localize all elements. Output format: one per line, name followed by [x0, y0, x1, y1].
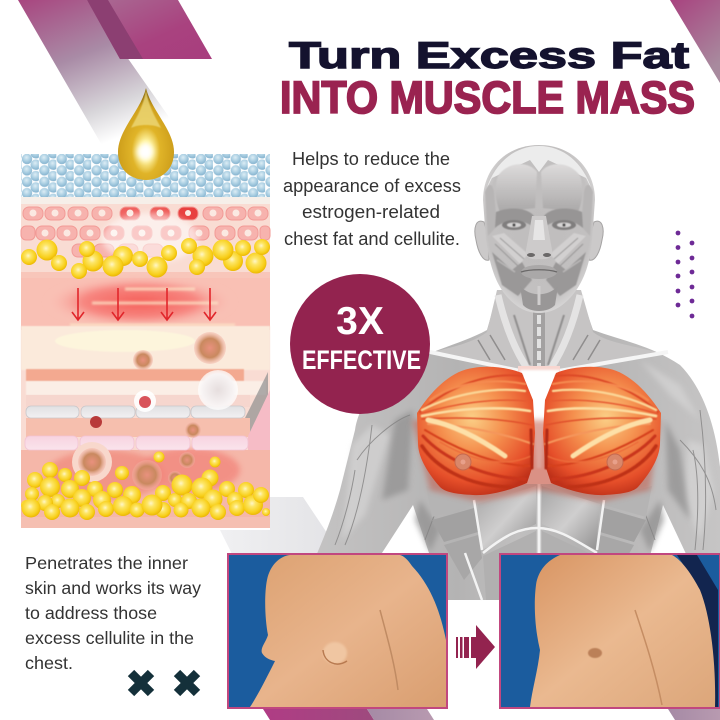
before: breast bump — [323, 642, 347, 664]
icon: golden oil drop — [118, 88, 174, 180]
figure: left pectoral muscle — [417, 367, 535, 495]
skin: cell nuclei — [30, 210, 262, 236]
callout badge: 3X effective — [290, 274, 430, 414]
photo: after — [500, 554, 720, 708]
after: arm crease — [635, 610, 662, 705]
text block: helps to reduce: chest fat and cellulite. — [284, 229, 460, 249]
skin: red heat layer — [21, 276, 270, 330]
skin: base — [21, 200, 270, 528]
text block: penetrates the inner skin: chest. — [25, 653, 73, 673]
after: nipple — [588, 648, 602, 658]
anatomical muscle figure — [316, 145, 720, 600]
badge: effective: EFFECTIVE — [302, 345, 421, 375]
decorative band: faded purple to grey, top left — [18, 0, 190, 147]
decorative band overlap — [87, 0, 143, 59]
badge: 3X: 3X — [336, 300, 384, 343]
title — [280, 35, 695, 123]
figure: shoulder shading — [382, 410, 690, 552]
skin: grey membrane cells — [26, 406, 245, 418]
figure: right pectoral muscle — [543, 367, 661, 495]
skin: cream dermis layer — [21, 326, 270, 395]
after: dark shadow — [677, 555, 718, 707]
before: arm crease — [380, 610, 398, 690]
decorative band: bottom right — [668, 709, 720, 720]
decorative band: purple parallelogram, top left — [87, 0, 212, 59]
skin: upper fat strip — [21, 272, 270, 281]
decorative grey hexagon behind photo — [220, 497, 345, 560]
after: chest — [530, 555, 715, 707]
figure: head — [483, 145, 595, 313]
skin: epidermis cells — [21, 207, 270, 257]
text block: penetrates the inner skin: excess cellulite in the — [25, 628, 194, 648]
figure: sternum glow — [518, 366, 560, 484]
text block: penetrates the inner skin: skin and works its way — [25, 578, 201, 598]
figure: muscle lines — [335, 410, 716, 550]
skin: red arrows — [72, 288, 216, 320]
text block: penetrates the inner skin — [25, 553, 201, 673]
decorative purple dots — [676, 231, 694, 318]
figure: ears — [475, 221, 603, 260]
figure: neck muscle lines — [430, 295, 668, 372]
title line 1: Turn Excess Fat — [289, 35, 689, 76]
decorative band: bottom left — [263, 709, 374, 720]
text block: helps to reduce — [283, 149, 461, 249]
figure: neck — [430, 290, 660, 372]
skin: yellow fat cells upper — [21, 238, 270, 279]
skin: pink membrane cells — [25, 436, 248, 450]
skin: yellow fat cells lower — [21, 452, 270, 520]
skin: deep layers — [21, 372, 270, 528]
skin: blue surface bubbles — [21, 154, 270, 200]
panel: skin layers diagram — [21, 154, 270, 528]
text block: helps to reduce: Helps to reduce the — [292, 149, 450, 169]
text block: helps to reduce: appearance of excess — [283, 176, 461, 196]
figure: arm highlights — [342, 360, 714, 540]
before: chest — [250, 555, 446, 707]
skin: white swirl — [102, 213, 198, 263]
decorative triangle: top right — [670, 0, 720, 83]
skin: target cells — [72, 332, 238, 490]
text block: penetrates the inner skin: Penetrates the inner — [25, 553, 188, 573]
photo: before — [228, 554, 447, 708]
decorative band: bottom middle — [367, 709, 434, 720]
figure: torso and arms silhouette — [316, 295, 720, 600]
skin: pale strip — [21, 197, 270, 204]
title line 2: INTO MUSCLE MASS — [280, 72, 695, 123]
icon: two cross marks — [131, 673, 197, 693]
figure: abdominal muscles — [426, 480, 652, 600]
figure: pectoral shadow — [412, 420, 660, 502]
icon: right arrow — [456, 625, 495, 669]
text block: penetrates the inner skin: to address those — [25, 603, 157, 623]
text block: helps to reduce: estrogen-related — [302, 202, 440, 222]
